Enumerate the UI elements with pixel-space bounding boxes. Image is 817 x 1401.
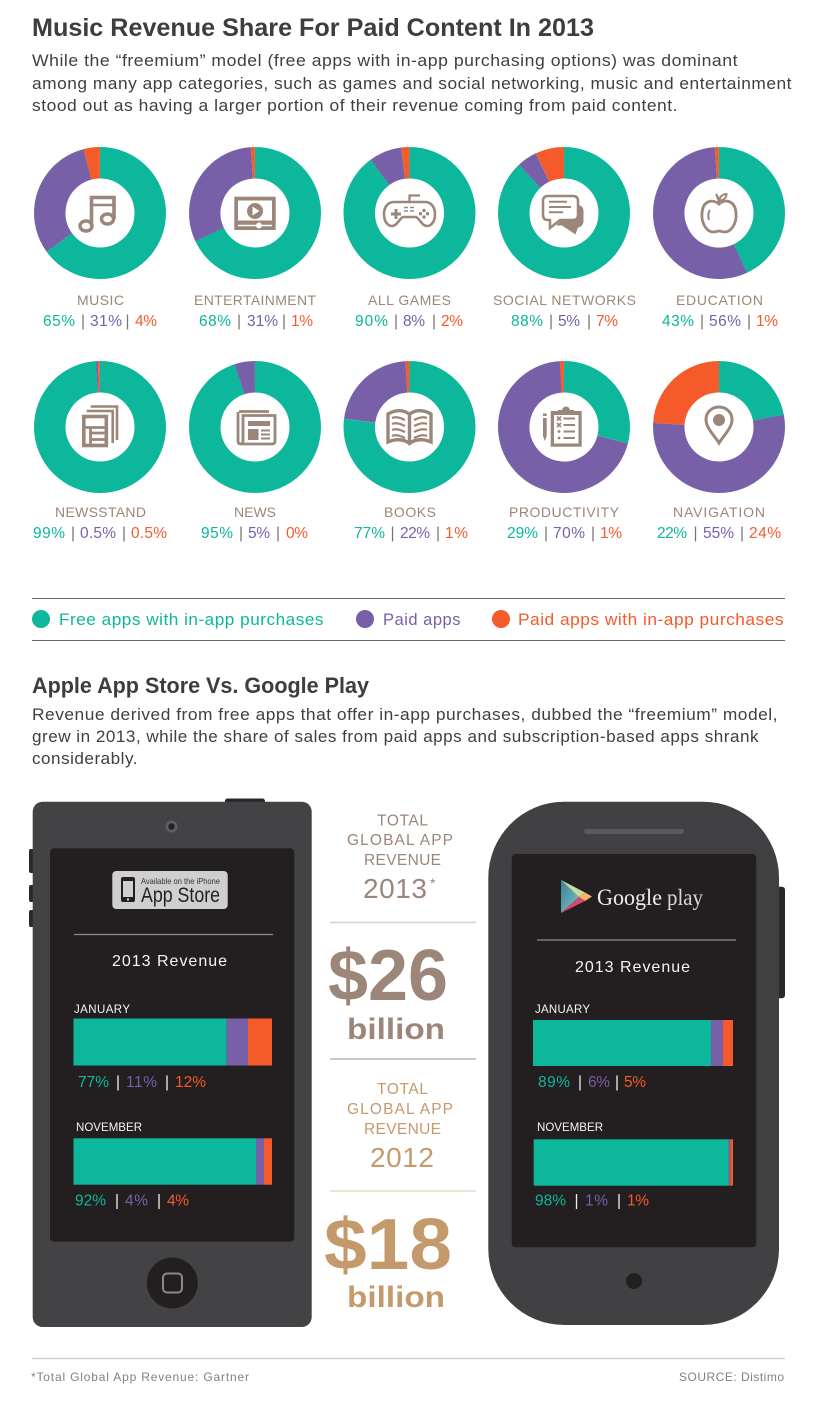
amount: $26: $26 <box>328 936 448 1016</box>
shares: social networks <box>511 313 618 330</box>
shares: all games: | <box>394 313 398 330</box>
panel: total global app revenue 2013 <box>328 812 476 1046</box>
panel: all games <box>339 143 480 330</box>
source: SOURCE: Distimo <box>679 1370 784 1384</box>
intro text: While the “freemium” model (free apps with in-app purchasing options) was dominant <box>32 51 738 70</box>
shares: November <box>535 1192 649 1210</box>
heading: apple vs google: Apple App Store Vs. Google Play <box>32 673 370 698</box>
label: total global app revenue <box>347 812 453 869</box>
shares: January: | <box>578 1074 582 1091</box>
label: entertainment: ENTERTAINMENT <box>194 292 316 308</box>
shares: November: 4% <box>125 1192 148 1210</box>
phone: Android <box>488 802 785 1325</box>
camera <box>166 820 178 832</box>
bar: January <box>74 1018 272 1066</box>
shares: newsstand: | <box>71 525 75 542</box>
shares: January: 6% <box>588 1074 610 1091</box>
shares: January: | <box>165 1074 169 1091</box>
shares: November: 1% <box>585 1192 608 1210</box>
year: 2012: 2012 <box>370 1142 434 1173</box>
shares: music: 4% <box>135 313 157 330</box>
panel: books <box>353 371 468 542</box>
year: 2013: * <box>430 875 436 891</box>
shares: November: 4% <box>167 1192 189 1210</box>
icon: apple <box>702 194 736 232</box>
shares: navigation: | <box>693 525 698 542</box>
shares: education: 43% <box>662 313 694 330</box>
panel: newsstand <box>33 374 167 542</box>
bar: November <box>534 1139 733 1186</box>
panel: entertainment <box>188 146 322 330</box>
shares: music: | <box>81 313 85 330</box>
legend <box>32 610 784 629</box>
shares: books: 22% <box>400 525 430 542</box>
home button <box>147 1258 198 1308</box>
shares: navigation: 24% <box>749 525 781 542</box>
donut: news <box>192 364 318 490</box>
shares: November: 92% <box>75 1192 106 1210</box>
label: January: JANUARY <box>535 1004 590 1016</box>
shares: productivity: 29% <box>507 525 538 542</box>
icon: speech bubbles <box>543 196 584 234</box>
intro text: stood out as having a larger portion of their revenue coming from paid content. <box>32 96 678 115</box>
shares: newsstand: 99% <box>33 525 65 542</box>
Google Play logo: play <box>667 885 703 910</box>
label: total global app revenue: GLOBAL APP <box>347 1101 453 1118</box>
shares: newsstand <box>33 525 167 542</box>
shares: November: | <box>617 1192 621 1210</box>
shares: January: 89% <box>538 1074 570 1091</box>
shares: navigation: 55% <box>703 525 734 542</box>
shares: newsstand: 0.5% <box>131 525 167 542</box>
shares: entertainment <box>199 313 313 330</box>
label: November: NOVEMBER <box>537 1122 603 1134</box>
shares: productivity: 1% <box>600 525 622 542</box>
shares: news: | <box>276 525 280 542</box>
shares: navigation: | <box>740 525 744 542</box>
label: books: BOOKS <box>384 504 436 520</box>
shares: education <box>662 313 778 330</box>
side button <box>775 887 785 998</box>
App Store badge: Available on the iPhone <box>141 876 220 886</box>
phone body <box>488 802 779 1325</box>
bar: November <box>74 1138 272 1185</box>
icon: magazine stack <box>84 406 117 446</box>
shares: books: | <box>390 525 395 542</box>
panel: news <box>192 364 318 542</box>
unit: billion: billion <box>347 1281 445 1314</box>
legend item: free apps: Free apps with in-app purchases <box>59 610 324 629</box>
section text <box>32 705 778 768</box>
App Store badge <box>112 871 228 909</box>
donut: social networks <box>493 142 635 284</box>
legend item: paid apps: Paid apps <box>383 610 461 629</box>
shares: November: | <box>157 1192 161 1210</box>
label: newsstand: NEWSSTAND <box>55 504 146 520</box>
shares: social networks: 88% <box>511 313 543 330</box>
heading: 2013 Revenue: 2013 Revenue <box>575 959 690 976</box>
shares: January: 12% <box>175 1074 206 1091</box>
shares: news: 0% <box>286 525 308 542</box>
label: news: NEWS <box>234 504 276 520</box>
shares: news: 95% <box>201 525 233 542</box>
shares: music: | <box>125 313 130 330</box>
intro text <box>32 51 792 115</box>
shares: all games <box>355 313 463 330</box>
shares: education: 56% <box>709 313 741 330</box>
donut: navigation <box>660 368 778 486</box>
amount: $18: $18 <box>324 1205 452 1285</box>
icon: clipboard and pencil <box>543 406 582 447</box>
shares: newsstand: | <box>122 525 126 542</box>
shares: January: | <box>615 1074 619 1091</box>
donut: books <box>353 371 466 483</box>
label: social networks: SOCIAL NETWORKS <box>493 292 636 308</box>
icon: game controller <box>384 196 435 226</box>
shares: November: | <box>115 1192 119 1210</box>
legend item: paid apps with in-app purchases: Paid apps with in-app purchases <box>518 610 784 629</box>
heading: 2013 Revenue: 2013 Revenue <box>112 953 227 970</box>
label: November: NOVEMBER <box>76 1122 142 1134</box>
panel: music <box>30 143 170 330</box>
icon: video player <box>234 197 276 230</box>
shares: entertainment: | <box>282 313 286 330</box>
panel: navigation <box>657 368 781 542</box>
shares: navigation <box>657 525 781 542</box>
phone: iPhone <box>29 798 312 1327</box>
label: total global app revenue <box>347 1081 453 1138</box>
panel: social networks <box>493 142 636 330</box>
shares: books: 1% <box>445 525 468 542</box>
shares: entertainment: 68% <box>199 313 231 330</box>
shares: productivity: | <box>591 525 595 542</box>
label: January: JANUARY <box>74 1004 130 1016</box>
icon: newspaper <box>238 412 275 444</box>
footnote: *Total Global App Revenue: Gartner <box>31 1370 249 1384</box>
shares: books: 77% <box>354 525 385 542</box>
shares: November <box>75 1192 189 1210</box>
donut: education <box>652 146 786 280</box>
shares: social networks: | <box>587 313 591 330</box>
donut: newsstand <box>47 374 153 480</box>
title: music revenue share: Music Revenue Share For Paid Content In 2013 <box>32 14 594 42</box>
intro text: among many app categories, such as games and social networking, music and entertainment <box>32 74 792 93</box>
panel: total global app revenue 2012 <box>324 1081 476 1314</box>
shares: news: 5% <box>248 525 270 542</box>
Google Play logo: Google <box>597 885 662 910</box>
Google Play logo <box>561 880 703 913</box>
shares: November: | <box>574 1192 579 1210</box>
shares: January <box>78 1074 206 1091</box>
panel: education <box>652 146 786 330</box>
donut: entertainment <box>188 146 322 280</box>
shares: navigation: 22% <box>657 525 687 542</box>
shares: education: 1% <box>756 313 778 330</box>
shares: social networks: | <box>549 313 553 330</box>
icon: map pin <box>706 407 732 443</box>
shares: music: 31% <box>90 313 122 330</box>
shares: newsstand: 0.5% <box>80 525 116 542</box>
side buttons <box>29 798 265 927</box>
label: total global app revenue: TOTAL <box>377 1081 428 1098</box>
shares: productivity: 70% <box>553 525 585 542</box>
label: total global app revenue: TOTAL <box>377 812 428 830</box>
home button <box>626 1273 642 1289</box>
screen <box>512 854 756 1247</box>
shares: social networks: 5% <box>558 313 580 330</box>
screen <box>50 848 294 1242</box>
section text: considerably. <box>32 749 138 768</box>
icon: open book <box>388 411 431 444</box>
bar: January <box>533 1020 733 1066</box>
shares: January: | <box>116 1074 120 1091</box>
shares: entertainment: 31% <box>247 313 278 330</box>
shares: entertainment: | <box>237 313 241 330</box>
shares: January <box>538 1074 646 1091</box>
shares: education: | <box>700 313 704 330</box>
shares: news <box>201 525 308 542</box>
App Store badge: App Store <box>141 884 220 907</box>
donut: productivity <box>503 366 625 488</box>
shares: all games: 90% <box>355 313 388 330</box>
shares: January: 11% <box>126 1074 157 1091</box>
donut: music <box>30 143 170 283</box>
shares: all games: | <box>432 313 436 330</box>
speaker <box>584 829 684 834</box>
label: navigation: NAVIGATION <box>673 504 765 520</box>
shares: January: 5% <box>624 1074 646 1091</box>
shares: productivity: | <box>544 525 548 542</box>
label: productivity: PRODUCTIVITY <box>509 504 620 520</box>
shares: January: 77% <box>78 1074 109 1091</box>
label: music: MUSIC <box>77 292 124 308</box>
label: total global app revenue: REVENUE <box>364 1121 441 1138</box>
label: all games: ALL GAMES <box>368 292 451 308</box>
shares: news: | <box>239 525 243 542</box>
phone body <box>33 802 312 1327</box>
panel: productivity <box>503 366 625 542</box>
shares: education: | <box>747 313 751 330</box>
shares: books: | <box>436 525 440 542</box>
shares: productivity <box>507 525 622 542</box>
shares: books <box>354 525 468 542</box>
section text: Revenue derived from free apps that offer in-app purchases, dubbed the “freemium” model, <box>32 705 778 724</box>
shares: music <box>43 313 157 330</box>
shares: November: 1% <box>627 1192 649 1210</box>
shares: all games: 8% <box>403 313 425 330</box>
section text: grew in 2013, while the share of sales from paid apps and subscription-based apps shrank <box>32 727 759 746</box>
unit: billion: billion <box>347 1013 445 1046</box>
year: 2013: 2013 <box>363 873 427 904</box>
label: total global app revenue: REVENUE <box>364 852 441 869</box>
shares: all games: 2% <box>441 313 463 330</box>
icon: music notes <box>80 198 114 231</box>
donut: all games <box>339 143 480 283</box>
shares: social networks: 7% <box>596 313 618 330</box>
shares: entertainment: 1% <box>291 313 313 330</box>
shares: music: 65% <box>43 313 75 330</box>
label: total global app revenue: GLOBAL APP <box>347 832 453 849</box>
shares: November: 98% <box>535 1192 566 1210</box>
label: education: EDUCATION <box>676 292 763 308</box>
